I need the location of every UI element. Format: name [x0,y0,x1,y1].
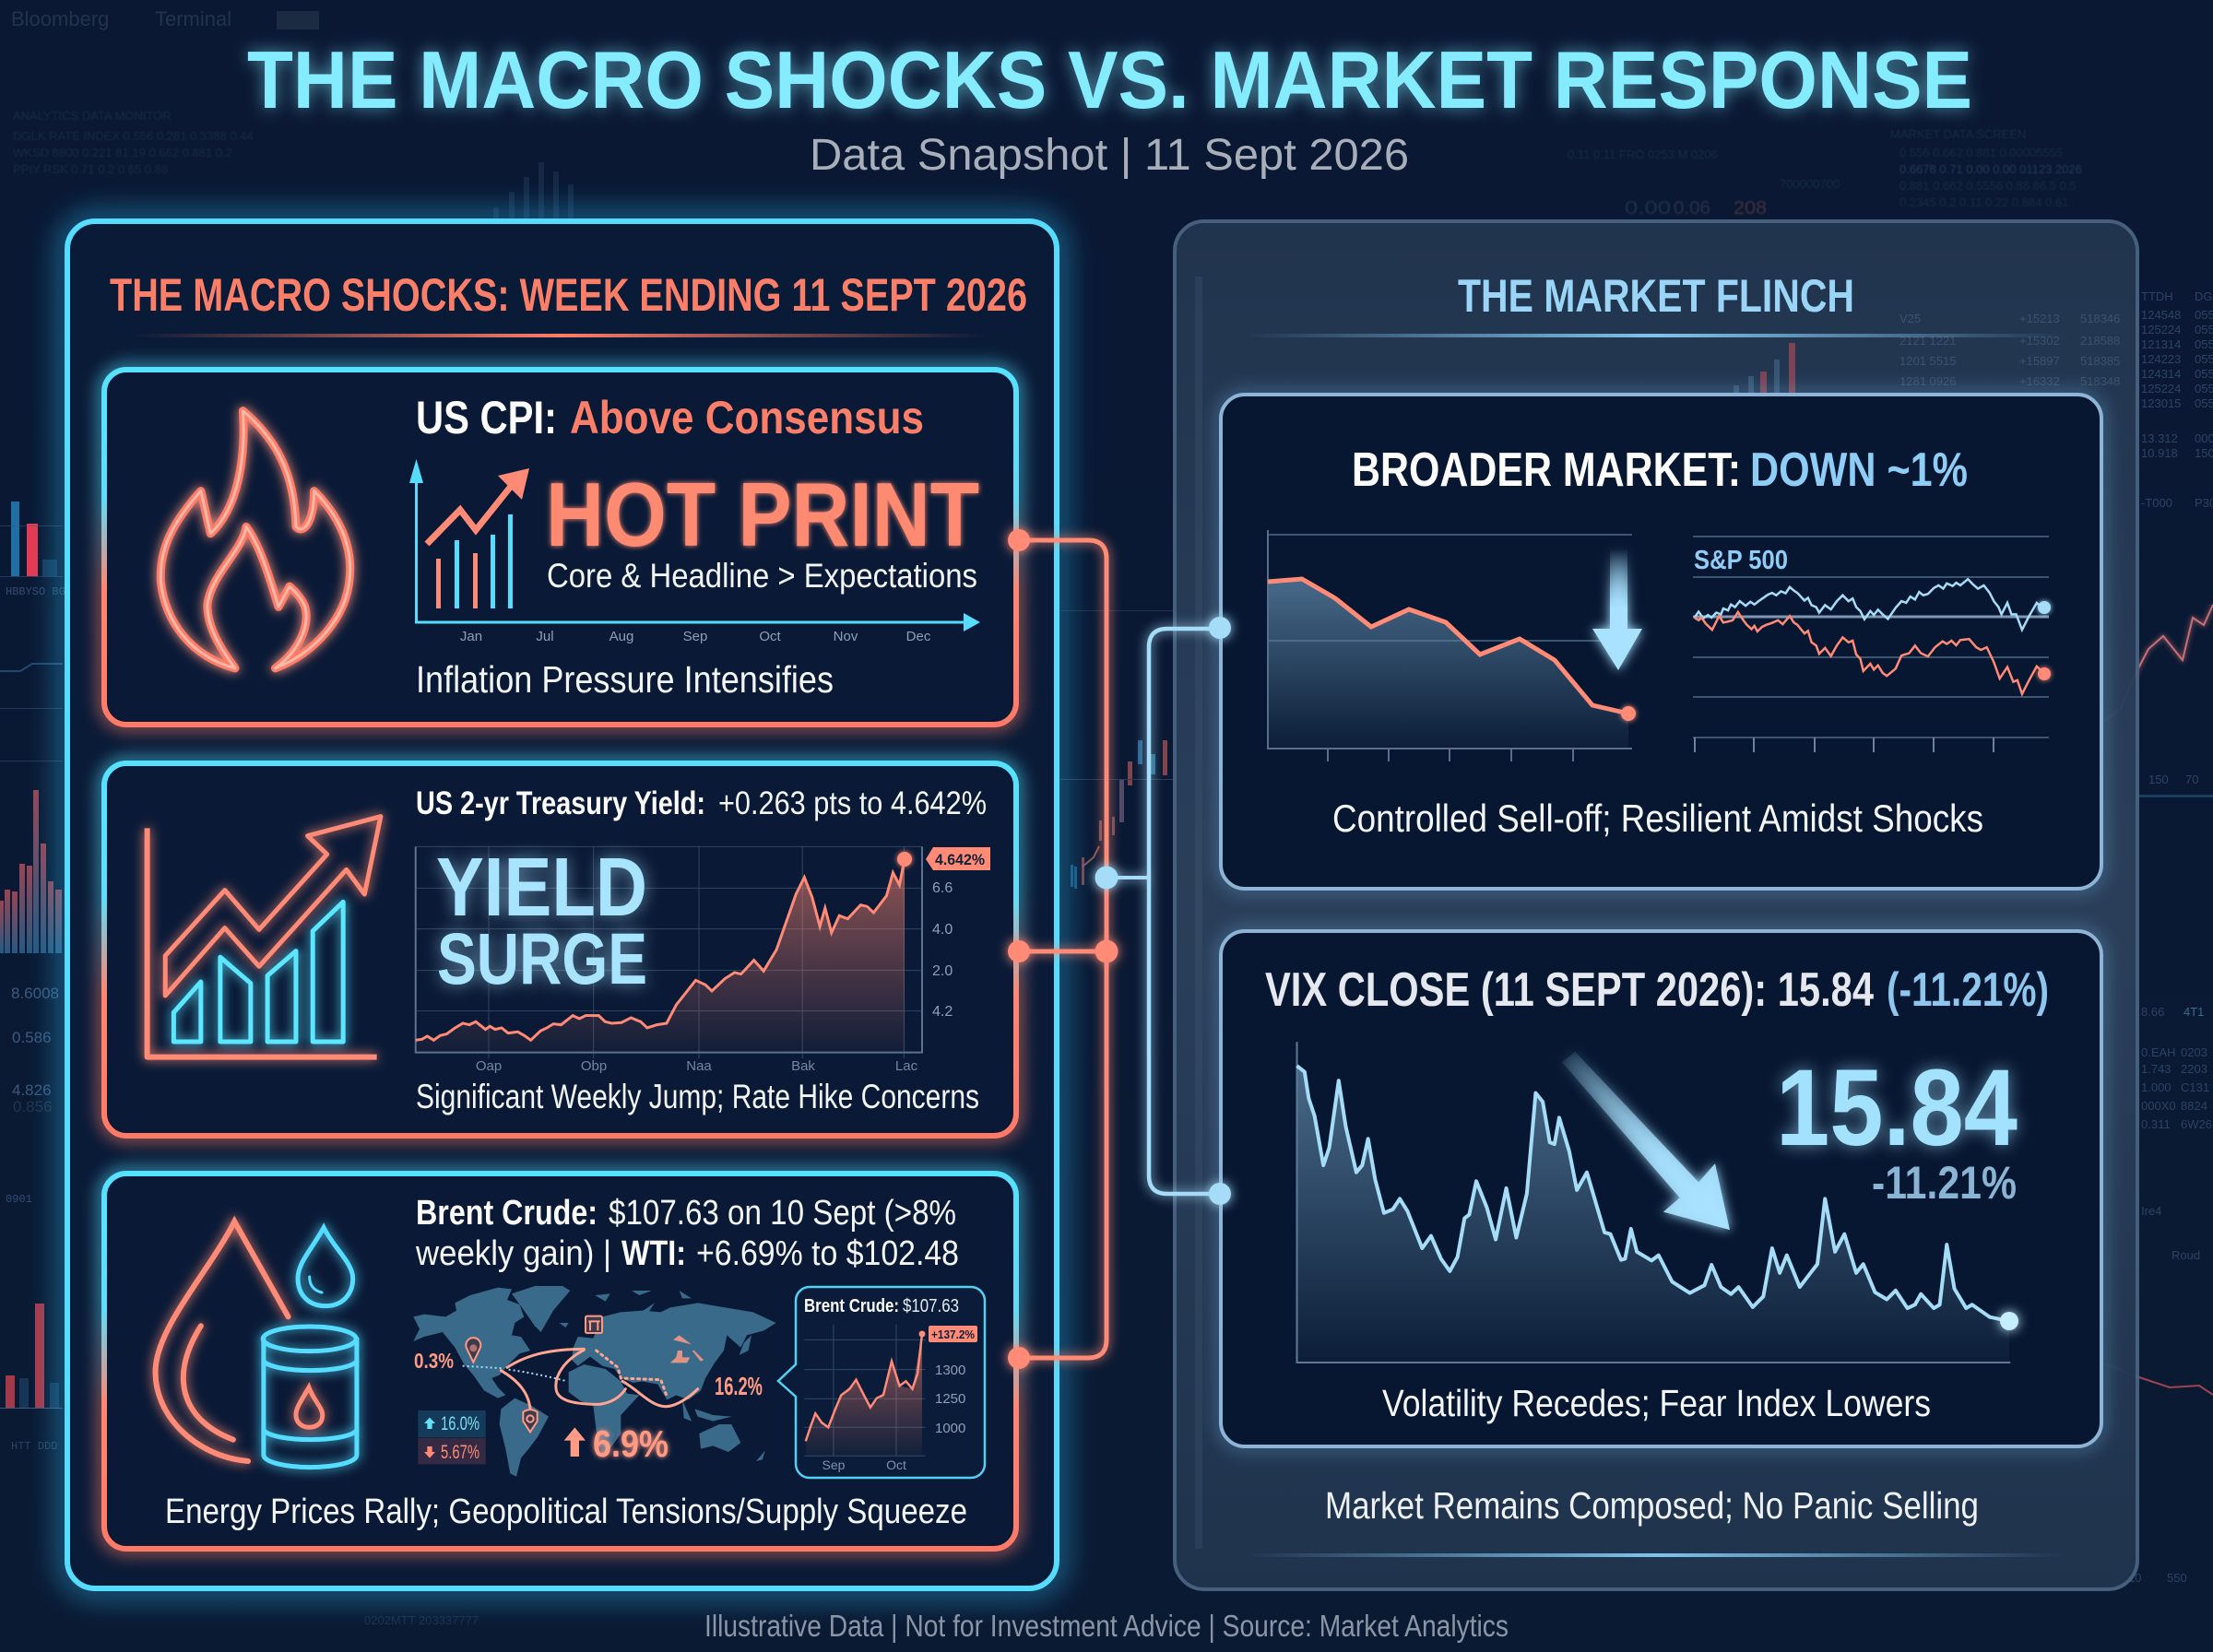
centre candles [1060,610,1222,889]
sub label: Core & Headline > Expectations [547,557,977,595]
oil heading: $107.63 on 10 Sept (>8% [609,1194,956,1233]
CPI heading [416,392,924,443]
big label [436,842,647,999]
right margin data: 13.312 [2141,431,2178,445]
right margin data: 0203 [2181,1045,2207,1059]
chart: mini rising bars: Sep [683,629,707,644]
chart: yield surge: Bak [791,1058,815,1074]
faint terminal background: 0.11 0.11 FRO 0253 M 0206 [1568,148,1718,161]
faint terminal background: 0.06 [1674,198,1710,218]
panel: market flinch: 2121 1221 [1899,334,1956,348]
right margin data: 000X0 [2141,1099,2176,1113]
chart: S&P 500 comparison: S&P 500 [1694,546,1788,575]
right margin data: 124223 [2141,352,2181,366]
right margin data: 0202MTT 203337777 [364,1613,479,1627]
panel: macro shocks [67,221,1057,1588]
chart: mini rising bars: Jan [460,629,482,644]
continents [413,1286,776,1477]
caption: Significant Weekly Jump; Rate Hike Concerns [416,1078,979,1115]
oil heading: Brent Crude: [416,1194,598,1233]
right margin data: 10.918 [2141,446,2178,460]
right margin data: 124548 [2141,308,2181,322]
panel: market flinch: +15897 [2019,354,2060,368]
big label: YIELD [436,842,647,934]
oil heading [415,1194,959,1273]
world map [413,1286,776,1477]
chart: yield surge: Naa [686,1058,712,1074]
faint terminal background: 0.00 [1625,198,1671,218]
inset: Brent chart: +137.2% [931,1328,975,1341]
inset: Brent chart: 1250 [935,1391,965,1407]
icon: oil drop and barrel [156,1221,357,1468]
yield heading [416,785,987,821]
coral connector [1008,529,1118,1369]
right margin data: DG [2195,289,2213,303]
left margin bars: 0901 [6,1193,32,1206]
faint terminal background: 208 [1734,198,1767,218]
right margin data: 1.743 [2141,1062,2172,1076]
panel: market flinch: 518346 [2080,312,2120,325]
right margin data: C131 [2181,1080,2209,1094]
right margin data: 8824 [2181,1099,2207,1113]
card heading: DOWN ~1% [1750,443,1968,497]
yield heading: US 2-yr Treasury Yield: [416,785,705,821]
caption: Volatility Recedes; Fear Index Lowers [1382,1382,1931,1424]
panel: market flinch: +15213 [2019,312,2060,325]
faint terminal background: 0.881 0.662 0.5556 0.88 66.5 0.5 [1899,179,2077,193]
big label: SURGE [437,917,647,999]
right margin data: 0.311 [2141,1117,2171,1131]
world map: 16.2% [715,1372,763,1400]
right margin data: TTDH [2141,289,2173,303]
faint terminal background: Terminal [155,7,231,30]
big VIX value: 15.84 [1776,1047,2018,1169]
card: broader market [1221,395,2101,889]
inset: Brent chart: Oct [886,1457,906,1472]
chart: yield surge: 4.2 [932,1004,953,1020]
right margin data: 121314 [2141,337,2181,351]
faint terminal background: Bloomberg [11,7,109,30]
chart: broader market decline [1268,530,1636,761]
shipping routes [501,1349,698,1409]
world map: 6.9% [593,1422,669,1465]
right margin data: 2203 [2181,1062,2207,1076]
chart: mini rising bars: Dec [906,629,931,644]
panel: market flinch: 1201 5515 [1899,354,1956,368]
left margin bars: 0.586 [12,1029,52,1046]
right margin data: 150 [2148,773,2169,786]
oil heading: WTI: [621,1234,686,1273]
left margin bars: HBBYSO BGS [6,585,72,598]
chart: yield surge: 6.6 [932,880,953,896]
chart: yield surge: 4.0 [932,922,953,938]
inset: Brent chart: 1000 [935,1421,965,1436]
card heading: BROADER MARKET: [1352,443,1741,497]
panel: market flinch [1175,221,2137,1589]
right margin data: Ire4 [2141,1204,2161,1218]
caption: Controlled Sell-off; Resilient Amidst Shocks [1332,796,1983,840]
panel: market flinch: 518385 [2080,354,2120,368]
world map: 5.67% [441,1442,479,1463]
right margin data: 70 [2185,773,2198,786]
panel: market flinch: +15302 [2019,334,2060,348]
right margin data [364,289,2213,1627]
panel takeaway: Market Remains Composed; No Panic Selling [1325,1484,1979,1527]
chart: yield surge: 4.642% [935,851,985,868]
footer: Illustrative Data | Not for Investment Advice | Source: Market Analytics [704,1609,1509,1643]
chart: yield surge [416,846,990,1074]
faint terminal background: 700000700 [1780,177,1840,191]
chart: yield surge: 2.0 [932,963,953,979]
faint terminal background: 0.2345 0.2 0.11 0.22 0.884 0.61 [1899,195,2068,209]
chart: mini rising bars: Aug [609,629,633,644]
icon: rising chart [148,817,381,1057]
inset: Brent chart: 1300 [935,1363,965,1378]
chart: mini rising bars [409,459,980,644]
panel: market flinch: 518348 [2080,374,2120,388]
pins [466,1316,602,1432]
connectors: macro shocks to market [1008,529,1231,1369]
left margin bars: 8.6008 [11,985,59,1002]
right margin data: 125224 [2141,323,2181,336]
icon: flame [160,411,350,668]
card: crude oil [104,1174,1016,1549]
right margin data: 1.000 [2141,1080,2172,1094]
right margin data: -T000 [2141,496,2172,510]
faint terminal background: PPIY RSK 0.71 0.2 0.65 0.88 [13,162,168,176]
chart: mini rising bars: Jul [536,629,554,644]
inset: Brent chart: Sep [822,1457,846,1472]
delta boxes [418,1410,486,1437]
right margin data: 80 10 [2112,1571,2142,1585]
faint terminal background: WKSD 8800 0.221 81.19 0.662 0.881 0.2 [13,146,232,159]
VIX change: -11.21% [1872,1157,2017,1209]
right margin data: 123015 [2141,396,2181,410]
panel heading: THE MACRO SHOCKS: WEEK ENDING 11 SEPT 2026 [110,269,1027,321]
chart: yield surge: Oap [476,1058,502,1074]
chart: VIX line [1297,1042,2018,1363]
caption: Energy Prices Rally; Geopolitical Tensions/Supply Squeeze [165,1493,967,1531]
card: treasury yield [104,763,1016,1136]
inset: Brent chart: Brent Crude: [804,1296,899,1316]
chart: yield surge: Obp [581,1058,607,1074]
chart: mini rising bars: Nov [834,629,858,644]
left margin bars: HTT DDD [11,1440,57,1453]
subtitle: Data Snapshot | 11 Sept 2026 [810,131,1409,180]
arrow: falling volatility [1562,1052,1730,1230]
big label: HOT PRINT [546,464,979,565]
VIX heading: VIX CLOSE (11 SEPT 2026): 15.84 [1265,963,1874,1017]
faint terminal background: 0.6678 0.71 0.00 0.00 01123 2026 [1899,162,2082,176]
left margin bars: 4.826 [12,1081,52,1099]
panel: market flinch: 1281 0926 [1899,374,1956,388]
panel: market flinch: 218588 [2080,334,2120,348]
right margin data: 4T1 [2183,1005,2204,1019]
world map: 0.3% [414,1349,454,1373]
card: US CPI [104,370,1016,725]
chart: S&P 500 comparison [1693,537,2051,752]
right margin data: 0.EAH [2141,1045,2176,1059]
arrow: down [1592,549,1642,670]
caption: Inflation Pressure Intensifies [416,658,834,701]
right margin data: 8.66 [2141,1005,2164,1019]
right margin data: 6W26 [2181,1117,2212,1131]
oil heading: +6.69% to $102.48 [696,1234,959,1273]
right margin data: Roud [2172,1248,2200,1262]
inset: Brent chart [778,1287,985,1478]
card: VIX [1221,931,2101,1446]
left margin bars: 0.856 [13,1098,53,1115]
yield heading: +0.263 pts to 4.642% [718,785,987,821]
panel: market flinch: V25 [1899,312,1921,325]
faint terminal background: ANALYTICS DATA MONITOR [13,109,172,123]
right margin data: 125224 [2141,382,2181,395]
blue connector [1095,617,1231,1205]
title: THE MACRO SHOCKS VS. MARKET RESPONSE [247,34,1972,125]
faint terminal background: 0.556 0.662 0.881 0.00005555 [1899,146,2063,159]
right margin data: 124314 [2141,367,2181,381]
world map: 16.0% [441,1413,479,1434]
faint terminal background: DGLK RATE INDEX 0.556 0.281 0.3388 0.44 [13,129,254,143]
oil heading: weekly gain) | [415,1234,611,1273]
chart: mini rising bars: Oct [759,629,781,644]
CPI heading: US CPI: [416,392,557,443]
inset: Brent chart: $107.63 [903,1296,959,1316]
right margin data: 550 [2167,1571,2187,1585]
faint terminal background: MARKET DATA SCREEN [1890,127,2026,141]
CPI heading: Above Consensus [570,392,924,443]
left margin bars [0,502,72,1453]
panel: market flinch: +16332 [2019,374,2060,388]
chart: yield surge: Lac [895,1058,918,1074]
VIX heading: (-11.21%) [1887,963,2049,1017]
panel heading: THE MARKET FLINCH [1458,270,1854,322]
